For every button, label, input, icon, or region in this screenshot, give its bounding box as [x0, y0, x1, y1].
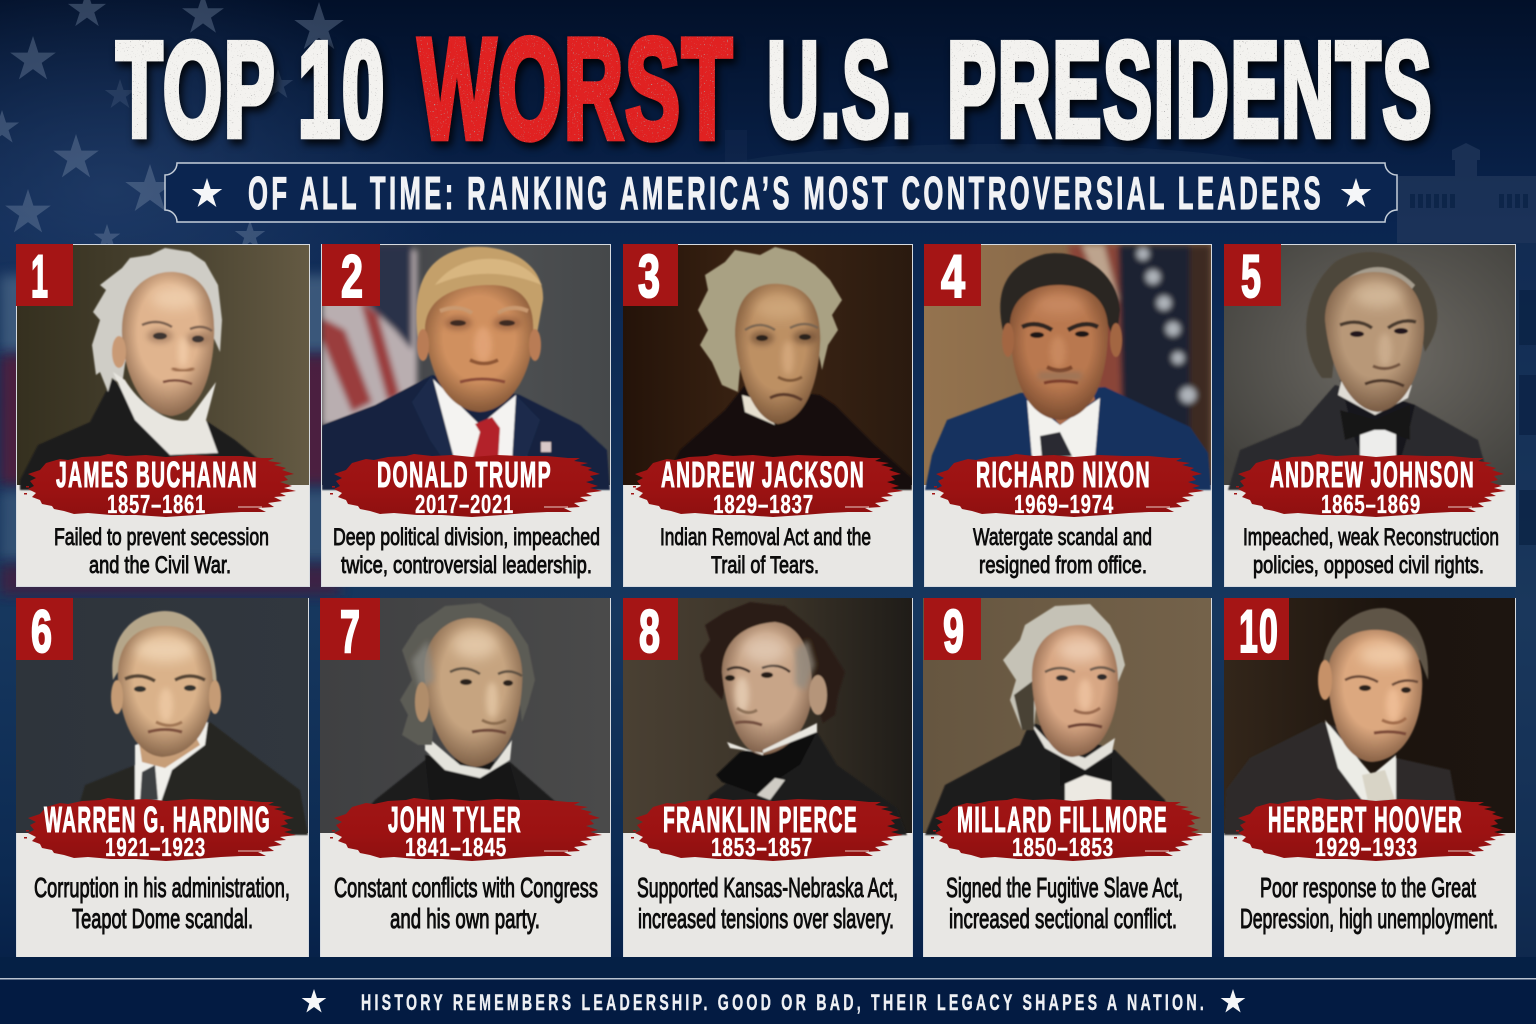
footer — [0, 957, 1536, 1024]
rank badge — [924, 598, 981, 665]
name banner: MILLARD FILLMORE — [957, 799, 1168, 840]
torn paper — [16, 814, 316, 1008]
rank badge: 3 — [638, 243, 660, 310]
description: resigned from office. — [979, 552, 1147, 579]
torn paper — [623, 468, 923, 662]
description: Trail of Tears. — [711, 552, 819, 579]
name banner: JAMES BUCHANAN — [56, 454, 258, 495]
portrait: Fillmore — [923, 598, 1211, 835]
torn paper — [320, 814, 620, 1008]
rank badge: 4 — [941, 243, 965, 310]
description: twice, controversial leadership. — [341, 552, 592, 579]
rank badge — [1224, 598, 1289, 665]
description — [334, 872, 598, 934]
description: Deep political division, impeached — [333, 524, 600, 551]
torn paper — [1224, 468, 1524, 662]
name banner: WARREN G. HARDING — [44, 799, 271, 840]
name banner — [330, 798, 602, 862]
description: Signed the Fugitive Slave Act, — [946, 872, 1183, 903]
torn paper — [623, 814, 923, 1008]
name banner — [631, 454, 903, 519]
rank badge — [16, 243, 73, 310]
description — [637, 872, 898, 934]
panel: Andrew Jackson — [623, 243, 923, 662]
name banner — [24, 454, 296, 519]
torn paper — [923, 814, 1223, 1008]
name banner: 1841–1845 — [405, 832, 507, 862]
title: TOP 10 — [116, 14, 386, 165]
rank badge: 6 — [31, 598, 52, 665]
portrait: Jackson — [623, 245, 912, 490]
name banner — [1234, 454, 1506, 519]
portrait: Buchanan — [17, 245, 309, 490]
name banner — [1234, 798, 1506, 862]
panel: Richard Nixon — [924, 244, 1212, 587]
panel: John Tyler — [320, 598, 611, 957]
rank badge: 1 — [31, 243, 48, 310]
description — [973, 524, 1152, 579]
name banner: 2017–2021 — [415, 489, 514, 519]
rank badge: 5 — [1241, 243, 1261, 310]
name banner — [631, 798, 903, 862]
torn paper — [924, 468, 1224, 662]
portrait: Nixon — [924, 245, 1211, 490]
description: Teapot Dome scandal. — [72, 903, 253, 934]
name banner: RICHARD NIXON — [976, 454, 1151, 495]
portrait: Johnson — [1224, 245, 1515, 490]
torn paper — [322, 468, 622, 662]
description: Indian Removal Act and the — [660, 524, 871, 551]
portrait: Tyler — [320, 598, 610, 835]
name banner: 1969–1974 — [1014, 489, 1114, 519]
panel: Franklin Pierce — [623, 598, 913, 957]
name banner: DONALD TRUMP — [377, 454, 552, 495]
description: Supported Kansas-Nebraska Act, — [637, 872, 898, 903]
description — [34, 872, 290, 934]
description: increased sectional conflict. — [949, 903, 1177, 934]
name banner — [932, 454, 1204, 519]
rank badge: 10 — [1239, 598, 1279, 665]
rank badge: 2 — [341, 243, 363, 310]
rank badge — [320, 598, 380, 665]
description: increased tensions over slavery. — [638, 903, 894, 934]
panel: Warren G. Harding — [16, 598, 316, 1008]
portrait: Pierce — [623, 598, 912, 835]
torn paper — [16, 468, 316, 662]
name banner: 1829–1837 — [713, 489, 814, 519]
name banner: 1865–1869 — [1321, 489, 1421, 519]
name banner: JOHN TYLER — [388, 799, 522, 840]
description — [1243, 524, 1499, 579]
description — [333, 524, 600, 579]
title — [116, 10, 1433, 169]
name banner: 1857–1861 — [107, 489, 206, 519]
panel: Millard Fillmore — [923, 598, 1212, 957]
rank badge — [16, 598, 73, 665]
panel: James Buchanan — [16, 244, 310, 587]
rank badge — [1224, 243, 1281, 310]
panel: Herbert Hoover — [1224, 598, 1516, 957]
rank badge: 9 — [943, 598, 964, 665]
description: Failed to prevent secession — [54, 524, 269, 551]
torn paper — [1224, 814, 1524, 1008]
rank badge — [322, 243, 380, 310]
rank badge — [924, 243, 981, 310]
rank badge — [623, 598, 678, 665]
description — [54, 524, 269, 579]
panel: Andrew Johnson — [1224, 243, 1524, 662]
name banner: 1853–1857 — [711, 832, 813, 862]
portrait: Hoover — [1224, 598, 1515, 835]
portrait: Harding — [16, 598, 308, 835]
portrait: Trump — [322, 245, 610, 490]
name banner — [24, 798, 296, 862]
description: and the Civil War. — [89, 552, 231, 579]
title: U.S. — [767, 14, 913, 165]
rank badge: 7 — [340, 598, 360, 665]
rank badge: 8 — [639, 598, 660, 665]
description: Corruption in his administration, — [34, 872, 290, 903]
panel: Donald Trump — [321, 244, 611, 587]
description: Watergate scandal and — [973, 524, 1152, 551]
name banner: ANDREW JACKSON — [661, 454, 865, 495]
title: WORST — [418, 10, 734, 169]
description: Constant conflicts with Congress — [334, 872, 598, 903]
name banner: 1921–1923 — [105, 832, 206, 862]
name banner: 1929–1933 — [1315, 832, 1418, 862]
rank badge — [623, 243, 678, 310]
name banner: 1850–1853 — [1012, 832, 1114, 862]
description — [946, 872, 1183, 934]
name banner — [330, 454, 602, 519]
name banner: FRANKLIN PIERCE — [663, 799, 858, 840]
name banner — [931, 798, 1203, 862]
description: and his own party. — [390, 903, 540, 934]
description — [660, 524, 871, 579]
description — [1240, 872, 1498, 934]
